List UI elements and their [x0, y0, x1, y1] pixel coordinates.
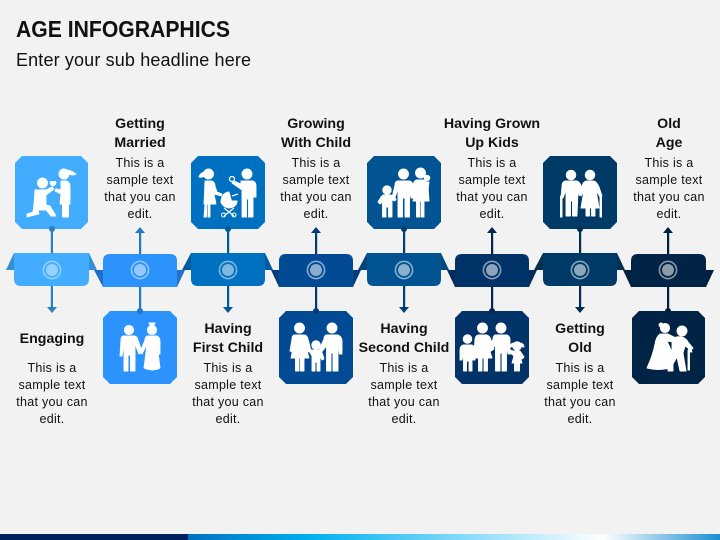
text: Getting Married: sample text — [106, 173, 174, 187]
icon: elderly pair with cane — [632, 311, 705, 384]
text: Engaging: that you can — [16, 395, 88, 409]
icon: family with grown kids — [455, 311, 529, 384]
step 6: Having Grown Up Kids — [444, 116, 540, 384]
step 5: Having Second Child — [359, 156, 449, 426]
step 3: Having First Child — [191, 156, 265, 426]
connector lines 3 — [223, 226, 233, 313]
text: Growing With Child: Growing — [287, 116, 345, 132]
ribbon 4 — [279, 254, 353, 287]
text: Getting Old: This is a — [555, 361, 605, 375]
icon: family with child — [279, 311, 353, 384]
text: Having Second Child: sample text — [370, 378, 438, 392]
text: Having Grown Up Kids: Having Grown — [444, 116, 540, 132]
node 1 — [43, 261, 61, 279]
node 5 — [395, 261, 413, 279]
icon: parents with stroller — [191, 156, 265, 229]
node 2 — [131, 261, 149, 279]
text: Engaging: Engaging — [20, 331, 84, 347]
text: Having First Child: This is a — [203, 361, 253, 375]
text: Getting Old: Old — [568, 340, 592, 356]
text: Growing With Child — [280, 116, 352, 221]
text: Growing With Child: edit. — [303, 207, 329, 221]
text: Old Age: that you can — [633, 190, 705, 204]
text: Growing With Child: sample text — [282, 173, 350, 187]
text: Having Second Child: Second Child — [359, 340, 449, 356]
icon: bride and groom — [103, 311, 177, 384]
text: Growing With Child: This is a — [291, 156, 341, 170]
text: Having First Child: edit. — [215, 412, 241, 426]
step 7: Getting Old — [543, 156, 617, 426]
text: Old Age — [633, 116, 705, 221]
ribbon 3 — [191, 253, 265, 286]
ribbon 1 — [14, 253, 89, 286]
text: Having Grown Up Kids: edit. — [479, 207, 505, 221]
ribbon 7 — [543, 253, 617, 286]
text: Having Second Child: that you can — [368, 395, 440, 409]
text: Old Age: This is a — [644, 156, 694, 170]
icon: family with baby — [367, 156, 441, 229]
connector lines 5 — [399, 226, 409, 313]
text: Getting Married: Getting — [115, 116, 165, 132]
text: Old Age: Age — [656, 135, 683, 151]
text: Old Age: edit. — [656, 207, 682, 221]
node 3 — [219, 261, 237, 279]
step 4: Growing With Child — [279, 116, 353, 384]
text: Having Grown Up Kids — [444, 116, 540, 221]
ribbon 8 — [631, 254, 706, 287]
icon: elderly couple — [543, 156, 617, 229]
node 6 — [483, 261, 501, 279]
node 4 — [307, 261, 325, 279]
text: Getting Old: that you can — [544, 395, 616, 409]
text: Getting Married: This is a — [115, 156, 165, 170]
text: Old Age: Old — [657, 116, 681, 132]
step 8: Old Age — [631, 116, 706, 384]
text: Getting Old: Getting — [555, 321, 605, 337]
text: Engaging: sample text — [18, 378, 86, 392]
text: Having Grown Up Kids: sample text — [458, 173, 526, 187]
step 2: Getting Married — [103, 116, 177, 384]
ribbon 6 — [455, 254, 529, 287]
text: Engaging: edit. — [39, 412, 65, 426]
connector lines 6 — [487, 227, 497, 314]
text: Having First Child: First Child — [193, 340, 263, 356]
connector lines 8 — [663, 227, 673, 314]
text: Old Age: sample text — [636, 173, 703, 187]
node 7 — [571, 261, 589, 279]
text: Engaging: This is a — [27, 361, 77, 375]
text: Getting Married: that you can — [104, 190, 176, 204]
text: Having Second Child: This is a — [379, 361, 429, 375]
icon: proposal — [15, 156, 88, 229]
text: Having First Child: sample text — [194, 378, 262, 392]
text: Having Grown Up Kids: that you can — [456, 190, 528, 204]
text: Getting Married: Married — [114, 135, 166, 151]
text: Having First Child — [192, 321, 264, 426]
text: Growing With Child: With Child — [281, 135, 351, 151]
text: Having Second Child: Having — [380, 321, 428, 337]
text: Having Second Child — [359, 321, 449, 426]
ribbon folds — [6, 253, 714, 287]
text: Having Second Child: edit. — [391, 412, 417, 426]
connector lines 1 — [47, 226, 57, 313]
text: Having Grown Up Kids: Up Kids — [465, 135, 519, 151]
text: Getting Old — [544, 321, 616, 426]
text: Getting Married — [104, 116, 176, 221]
connector lines 4 — [311, 227, 321, 314]
text: Having First Child: that you can — [192, 395, 264, 409]
title: AGE INFOGRAPHICS — [16, 16, 230, 42]
connector lines 7 — [575, 226, 585, 313]
step 1: Engaging — [14, 156, 89, 426]
subtitle: Enter your sub headline here — [16, 50, 251, 70]
ribbon 2 — [103, 254, 177, 287]
text: Having Grown Up Kids: This is a — [467, 156, 517, 170]
ribbon 5 — [367, 253, 441, 286]
connector lines 2 — [135, 227, 145, 314]
node 8 — [659, 261, 677, 279]
text: Growing With Child: that you can — [280, 190, 352, 204]
text: Getting Old: sample text — [546, 378, 614, 392]
footer bar — [0, 534, 720, 540]
text: Getting Old: edit. — [567, 412, 593, 426]
text: Having First Child: Having — [204, 321, 252, 337]
text: Engaging — [16, 331, 88, 426]
text: Getting Married: edit. — [127, 207, 153, 221]
